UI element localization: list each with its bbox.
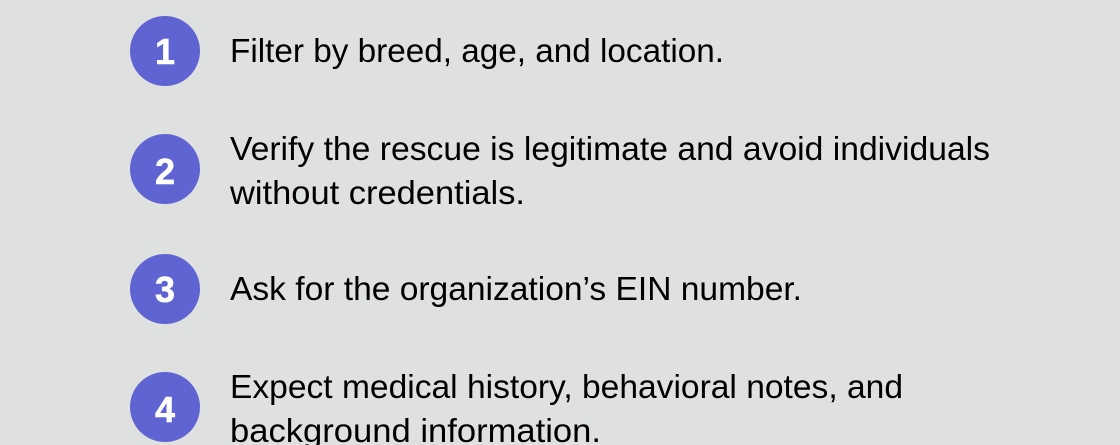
step 3 badge [130,254,200,324]
step 1 badge: 1 [155,31,175,72]
step 4 text [230,368,903,445]
step 4 [130,368,903,445]
step 2 text [229,130,990,211]
step 1 badge [130,16,200,86]
step 3 [130,254,802,324]
step 3 text: Ask for the organization’s EIN number. [230,270,802,307]
step 2 text: without credentials. [229,174,525,211]
step 3 badge: 3 [155,269,175,310]
step 2 text: Verify the rescue is legitimate and avoid individuals [230,130,990,167]
step 2 badge [130,134,200,204]
step 4 badge: 4 [155,389,175,430]
step 1 text: Filter by breed, age, and location. [230,32,724,69]
step 2 badge: 2 [155,151,175,192]
step 1 [130,16,724,86]
step 2 [130,130,990,211]
step 4 badge [130,372,200,442]
step 4 text: Expect medical history, behavioral notes, and [230,368,903,405]
